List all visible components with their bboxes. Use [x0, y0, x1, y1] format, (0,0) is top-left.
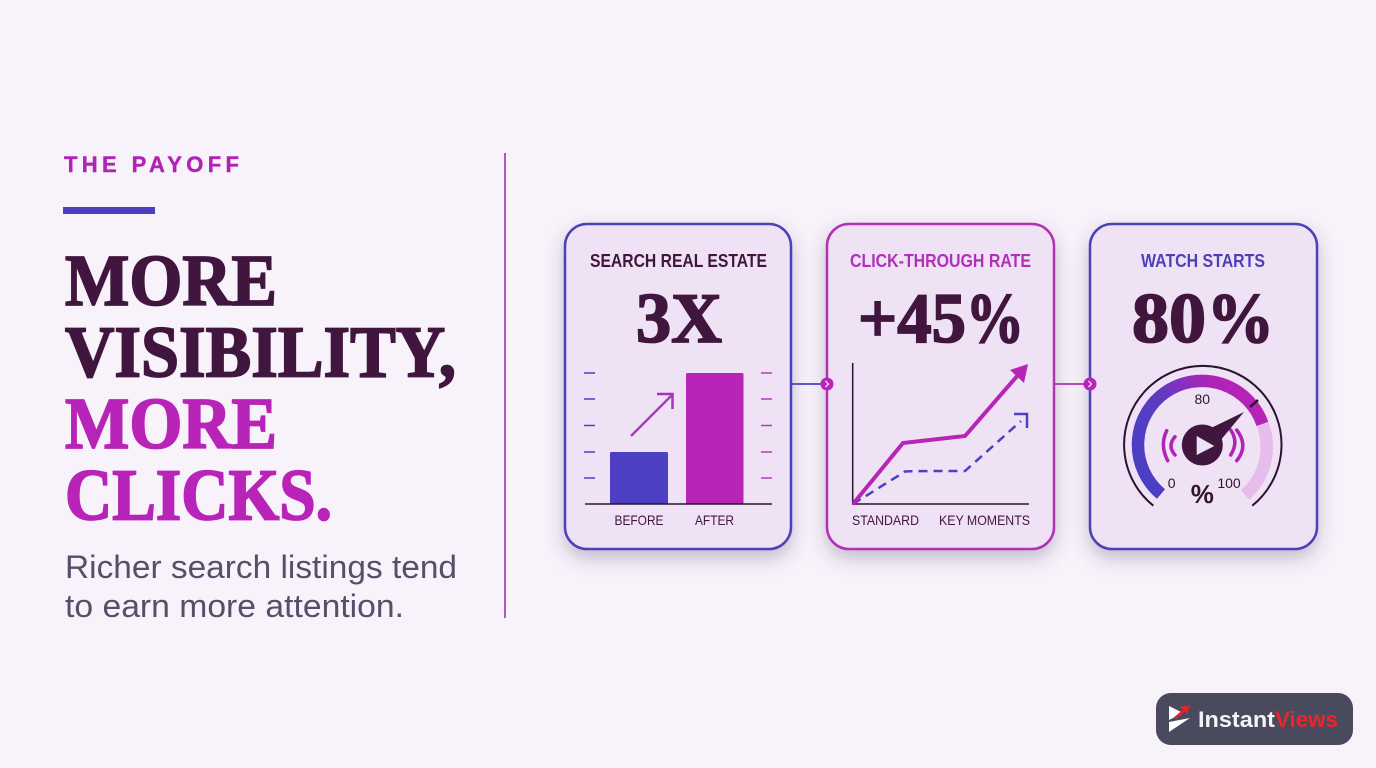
stat: 80%: 80 — [1132, 280, 1206, 358]
accent bar — [63, 207, 155, 214]
panel: click-through rate — [827, 224, 1054, 549]
heading: click-through rate: CLICK-THROUGH RATE — [850, 251, 1031, 271]
gauge — [1124, 366, 1282, 509]
line chart — [852, 363, 1030, 528]
panel: watch starts — [1090, 224, 1317, 549]
stat: +45% — [858, 280, 1024, 358]
stat: +45%: +45 — [858, 280, 966, 358]
line chart: KEY MOMENTS — [939, 512, 1030, 528]
gauge: 100 — [1217, 475, 1241, 491]
connector arrow: card one to two — [791, 378, 834, 390]
wordmark: Views — [1275, 707, 1338, 732]
logo badge: InstantViews — [1156, 693, 1353, 745]
title: MORE — [65, 240, 277, 321]
stat: 80% — [1132, 280, 1274, 358]
icon: play arrow — [1169, 705, 1190, 732]
line chart: STANDARD — [852, 512, 919, 528]
vertical divider — [504, 153, 506, 618]
gauge: % — [1191, 479, 1214, 509]
gauge: 0 — [1168, 475, 1176, 491]
panel: search real estate — [565, 224, 791, 549]
title: CLICKS. — [65, 454, 332, 536]
wordmark: Instant — [1198, 707, 1276, 732]
stat: 80%: % — [1207, 280, 1274, 358]
eyebrow: the payoff: THE PAYOFF — [64, 152, 239, 177]
heading: search real estate: SEARCH REAL ESTATE — [590, 251, 767, 271]
title: MORE — [65, 383, 277, 464]
subtitle: to earn more attention. — [65, 588, 404, 624]
connector arrow: card two to three — [1054, 378, 1096, 390]
stat: 3X: 3X — [636, 280, 722, 358]
wordmark — [1198, 707, 1338, 732]
stat: +45%: % — [966, 280, 1024, 358]
title: VISIBILITY, — [65, 312, 456, 392]
heading: watch starts: WATCH STARTS — [1141, 251, 1265, 271]
bar chart — [584, 373, 772, 528]
title — [65, 240, 456, 536]
bar chart: AFTER — [695, 512, 734, 528]
gauge: 80 — [1195, 391, 1210, 407]
subtitle — [65, 549, 457, 624]
subtitle: Richer search listings tend — [65, 549, 457, 585]
bar chart: BEFORE — [614, 512, 664, 528]
